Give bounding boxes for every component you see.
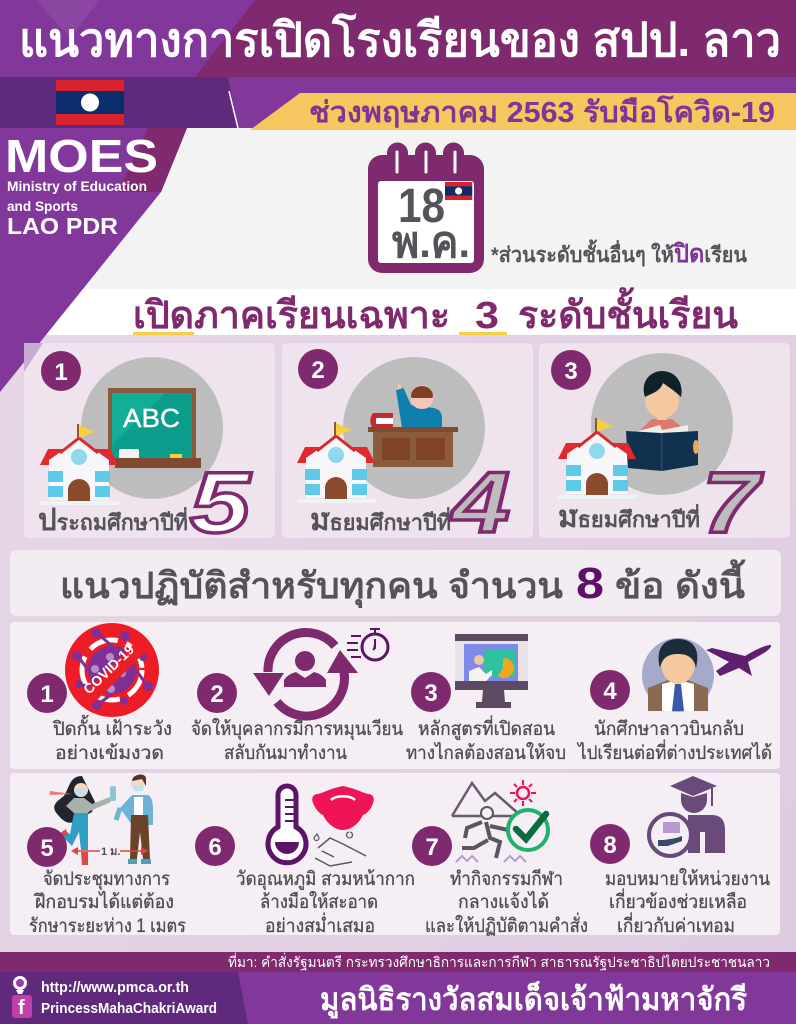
ministry name [7,178,147,214]
guideline 5 text [29,869,186,937]
panel: guideline heading: 8 [576,559,604,608]
panel: grade 12 [539,343,790,551]
heading: three levels: 3 [475,295,499,337]
ministry name: Ministry of Education [7,178,147,194]
facebook page: PrincessMahaChakriAward [41,1000,217,1017]
step 1: 1 [40,681,54,708]
step 1 [27,673,67,713]
icon: Lao flag [56,80,124,125]
panel: grade 10 [282,343,533,551]
source bar: ที่มา: คำสั่งรัฐมนตรี กระทรวงศึกษาธิการและการกีฬา สาธารณรัฐประชาธิปไตยประชาชนลาว [228,953,770,971]
guideline 5 text: จัดประชุมทางการ [43,869,170,891]
step 3: 3 [424,680,438,707]
panel: guideline heading: ข้อ ดังนี้ [615,559,746,606]
guideline 6 text [236,869,415,937]
step number [41,351,81,391]
step 3 [411,672,451,712]
grade numeral: 5 [190,455,251,551]
grade label: มัธยมศึกษาปีที่ [310,504,451,537]
icon: rotating staff [253,629,388,716]
LAO PDR: LAO PDR [7,213,118,239]
guideline 7 text: กลางแจ้งได้ [458,891,549,913]
icon: school [558,418,637,499]
website: http://www.pmca.or.th [41,979,189,996]
guideline 5 text: รักษาระยะห่าง 1 เมตร [29,916,186,937]
icon: calendar 18 May: 18 [398,180,445,233]
MOES wordmark: MOES [5,130,158,182]
icon: school [297,422,376,503]
grade numeral: 7 [702,455,764,551]
guideline 5 text: ฝึกอบรมได้แต่ต้อง [33,891,174,913]
step number: 2 [311,357,325,384]
guideline 1 text: อย่างเข้มงวด [55,743,164,764]
footer [0,972,796,1024]
step 5 [27,827,67,867]
subtitle date: ช่วงพฤษภาคม 2563 รับมือโควิด-19 [309,94,775,129]
step 7 [412,826,452,866]
heading: three levels: ภาคเรียนเฉพาะ [194,295,450,337]
icon: calendar 18 May: พ.ค. [392,218,470,267]
guideline 2 text [191,718,403,764]
guideline 2 text: จัดให้บุคลากรมีการหมุนเวียน [191,718,403,741]
step number: 3 [564,358,578,385]
icon: chalkboard [108,388,201,468]
icon: tuition support [649,776,725,856]
panel: guidelines 1-4 [10,622,780,769]
step 6: 6 [208,834,222,861]
grade label: ประถมศึกษาปีที่ [38,504,188,537]
icon: covid stop: COVID-19 [80,641,137,697]
icon: facebook: f [18,997,25,1019]
step 2 [197,673,237,713]
icon: school [40,424,119,505]
guideline 7 text: และให้ปฏิบัติตามคำสั่ง [425,912,588,937]
title banner [0,0,796,77]
step number [551,350,591,390]
heading: three levels: ระดับชั้นเรียน [518,287,738,337]
guideline 6 text: ล้างมือให้สะอาด [260,891,378,913]
step 5: 5 [40,835,54,862]
guideline 6 text: วัดอุณหภูมิ สวมหน้ากาก [236,869,415,891]
guideline 8 text: เกี่ยวข้องช่วยเหลือ [609,888,747,913]
icon: student reading [626,371,699,471]
heading: three levels: เปิด [133,295,194,337]
guideline 4 text: นักศึกษาลาวบินกลับ [594,719,744,740]
guideline 4 text [576,719,772,764]
step 4 [590,670,630,710]
icon: distancing people [50,774,153,865]
closure note: *ส่วนระดับชั้นอื่นๆ ให้ปิดเรียน [491,239,748,268]
icon: facebook [12,995,32,1019]
step 8: 8 [603,832,617,859]
grade label: มัธยมศึกษาปีที่ [558,501,700,534]
icon: student at desk [368,382,458,467]
guideline 8 text [605,868,770,937]
icon: calendar 18 May [368,144,484,273]
MOES corner panel [0,128,187,392]
step 7: 7 [425,834,439,861]
step 6 [195,826,235,866]
title banner: แนวทางการเปิดโรงเรียนของ สปป. ลาว [19,12,781,66]
step 2: 2 [210,681,224,708]
step number [298,349,338,389]
sub banner [0,77,796,130]
ministry name: and Sports [7,198,78,214]
icon: outdoor sport [452,780,548,862]
foundation name: มูลนิธิรางวัลสมเด็จเจ้าฟ้ามหาจักรี [320,980,747,1019]
guideline 3 text [406,715,566,764]
guideline 7 text [425,868,588,937]
icon: student and plane [642,638,771,712]
guideline 3 text: หลักสูตรที่เปิดสอน [418,715,555,740]
panel: guidelines 5-8 [10,773,780,937]
step number: 1 [54,359,68,386]
panel: guideline heading: แนวปฏิบัติสำหรับทุกคน จำนวน [60,565,563,609]
icon: online lesson monitor [455,634,528,708]
icon: chalkboard: ABC [123,403,180,433]
guideline 2 text: สลับกันมาทำงาน [224,743,347,764]
heading: three levels [133,287,738,337]
guideline 6 text: อย่างสม่ำเสมอ [265,912,375,937]
guideline 1 text: ปิดกั้น เฝ้าระวัง [52,715,172,740]
panel: guideline heading [10,550,781,616]
guideline 4 text: ไปเรียนต่อที่ต่างประเทศได้ [576,739,772,764]
guideline 8 text: เกี่ยวกับค่าเทอม [617,912,735,937]
guideline 1 text [52,715,172,764]
icon: thermometer, mask, hands [268,786,374,866]
source bar [0,952,796,972]
guideline 7 text: ทำกิจกรรมกีฬา [450,868,563,890]
guideline 8 text: มอบหมายให้หน่วยงาน [605,868,770,890]
step 8 [590,824,630,864]
icon: web [13,976,27,994]
grade numeral: 4 [450,455,510,551]
step 4: 4 [603,678,617,705]
icon: distancing people: 1 ม. [101,846,120,858]
icon: covid stop [65,623,159,717]
panel: grade 5 [24,343,275,551]
guideline 3 text: ทางไกลต้องสอนให้จบ [406,742,566,764]
